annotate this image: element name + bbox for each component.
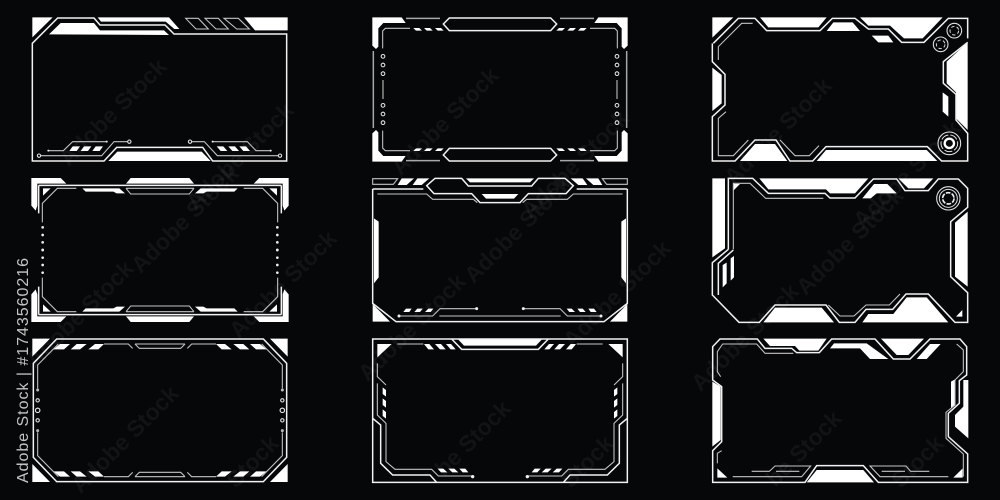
bottom left quadrant xyxy=(32,408,160,482)
bottom left quadrant xyxy=(31,249,160,322)
panel: frame row 1 column 3 xyxy=(712,17,968,161)
panel: frame row 1 column 1 xyxy=(32,17,288,161)
top right quadrant xyxy=(160,339,288,412)
watermark text: Stock xyxy=(556,430,619,493)
watermark text: Adobe Stock xyxy=(516,105,634,223)
top right quadrant xyxy=(500,17,628,89)
watermark text: Adobe Stock xyxy=(126,160,244,278)
watermark text: be Stock xyxy=(429,395,516,481)
watermark text: Adobe Stock xyxy=(181,97,299,215)
white fill shapes xyxy=(712,17,968,161)
top left quadrant xyxy=(32,339,160,412)
panel: frame row 3 column 2 xyxy=(373,339,627,482)
frame outline xyxy=(32,18,287,161)
bottom right quadrant xyxy=(160,249,289,322)
gear: top right xyxy=(947,23,962,38)
bottom left quadrant xyxy=(372,89,500,162)
left half xyxy=(373,339,500,482)
frame outline xyxy=(713,339,968,482)
white fill shapes xyxy=(712,178,968,322)
slanted tabs xyxy=(186,18,249,29)
watermark text: Adobe Stock xyxy=(719,72,837,190)
watermark text: Adobe Stock xyxy=(558,235,676,353)
gear icon xyxy=(937,187,960,210)
watermark text: Stock xyxy=(221,430,284,493)
panel: frame row 3 column 1 xyxy=(32,339,288,482)
panel: frame row 2 column 1 xyxy=(31,178,289,322)
watermark text: Adobe Stock xyxy=(686,278,804,396)
bottom right quadrant xyxy=(160,408,288,482)
watermark text: be Stock xyxy=(760,405,847,491)
top left quadrant xyxy=(372,17,500,89)
watermark text: Adobe Stock xyxy=(224,225,342,343)
top right quadrant xyxy=(160,178,289,251)
bottom right quadrant xyxy=(500,89,628,162)
watermark text: Adobe Stock xyxy=(353,268,471,386)
inner traces xyxy=(733,183,900,316)
frame outline xyxy=(712,18,968,161)
right half xyxy=(500,339,627,482)
gear: bottom right xyxy=(938,132,961,155)
inner thin traces xyxy=(718,23,819,156)
watermark text: Adobe Stock xyxy=(21,255,139,373)
inner traces xyxy=(717,344,963,477)
watermark text: Adobe Stock xyxy=(459,170,577,288)
left half xyxy=(373,178,500,322)
white fill shapes xyxy=(712,339,968,482)
watermark text: Adobe Stock xyxy=(54,53,172,171)
watermark text: Adobe Stock xyxy=(848,115,966,233)
node circles xyxy=(37,140,282,157)
watermark text: Adobe Stock xyxy=(791,182,909,300)
right half xyxy=(500,178,627,322)
circuit traces left xyxy=(41,142,128,156)
panel: frame row 2 column 3 xyxy=(712,178,968,322)
gear: second xyxy=(933,37,948,52)
panel: frame row 1 column 2 xyxy=(372,17,628,162)
corner triangles xyxy=(377,344,623,357)
white fill shapes xyxy=(32,17,288,161)
watermark text: Stock xyxy=(886,430,949,493)
left diagonal trace xyxy=(718,250,733,295)
watermark text: Adobe Stock xyxy=(386,62,504,180)
watermark text: Adobe Stock xyxy=(66,380,184,498)
bottom stripes xyxy=(69,146,250,151)
panel: frame row 3 column 3 xyxy=(712,339,968,482)
vertical stock id caption: Adobe Stock | #1743560216 xyxy=(15,258,32,483)
panel: frame row 2 column 2 xyxy=(373,178,627,322)
top left quadrant xyxy=(31,178,160,251)
frame outline xyxy=(712,178,968,322)
circuit traces right xyxy=(190,142,278,156)
